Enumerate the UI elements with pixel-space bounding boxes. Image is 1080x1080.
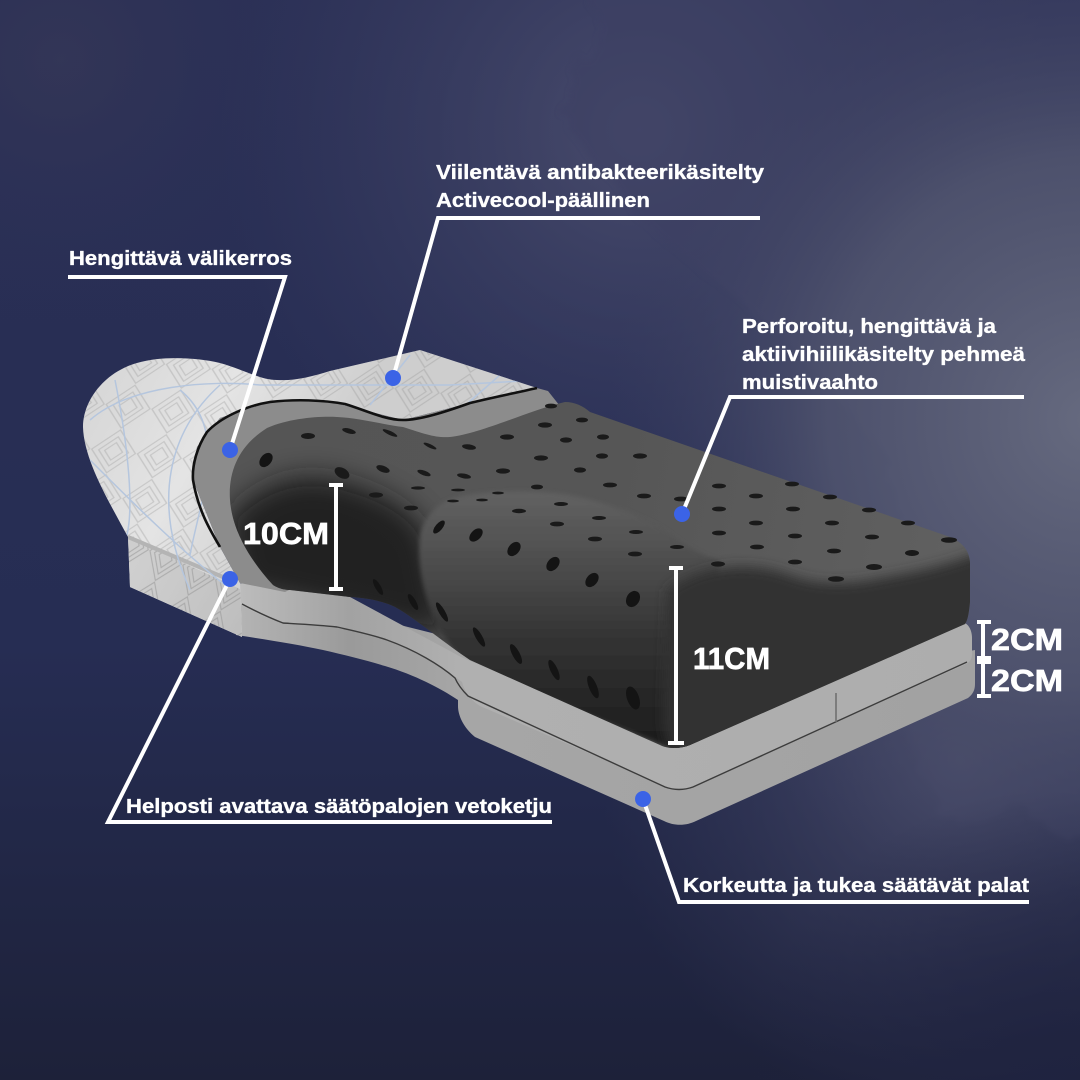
leader line: Hengittävä välikerros	[68, 277, 285, 450]
leader line: Viilentävä	[393, 218, 760, 378]
spacer layer	[193, 388, 575, 592]
upper adjustment layer	[236, 583, 972, 789]
panel: cover fabric	[83, 350, 535, 637]
front face of foam	[664, 551, 970, 748]
label: memory foam: muistivaahto	[742, 372, 878, 394]
dimension: upper 2CM: 2CM	[991, 622, 1063, 657]
pillow illustration	[70, 340, 990, 825]
leader line: Helposti avattava	[108, 579, 552, 822]
label: cooling cover: Activecool-päällinen	[436, 190, 650, 212]
dimension: lower 2CM: 2CM	[991, 663, 1063, 698]
label: memory foam: Perforoitu, hengittävä ja	[742, 316, 997, 338]
lower adjustment layer	[236, 596, 975, 825]
holes: top surface	[301, 404, 957, 582]
label: memory foam: aktiivihiilikäsitelty pehmeä	[742, 344, 1026, 366]
label: adjustment pieces: Korkeutta ja tukea säätävät palat	[683, 875, 1029, 897]
marker dots	[222, 370, 690, 807]
dimension: 10CM: 10CM	[243, 516, 329, 551]
label: cooling cover: Viilentävä antibakteerikäsitelty	[436, 162, 765, 184]
leader line: Perforoitu	[682, 397, 1024, 514]
holes: lobe side	[257, 450, 643, 711]
label: memory foam	[742, 316, 1026, 394]
label: zipper: Helposti avattava säätöpalojen vetoketju	[126, 796, 552, 818]
label: cooling cover	[436, 162, 765, 212]
leader line: Korkeutta	[643, 799, 1029, 902]
dimension: 11CM: 11CM	[693, 641, 770, 676]
panel: memory foam	[220, 395, 990, 760]
label: spacer layer: Hengittävä välikerros	[69, 248, 292, 270]
dimension: 10CM	[243, 485, 343, 589]
front lobe of foam	[419, 491, 720, 760]
dimension: 11CM	[668, 568, 770, 743]
